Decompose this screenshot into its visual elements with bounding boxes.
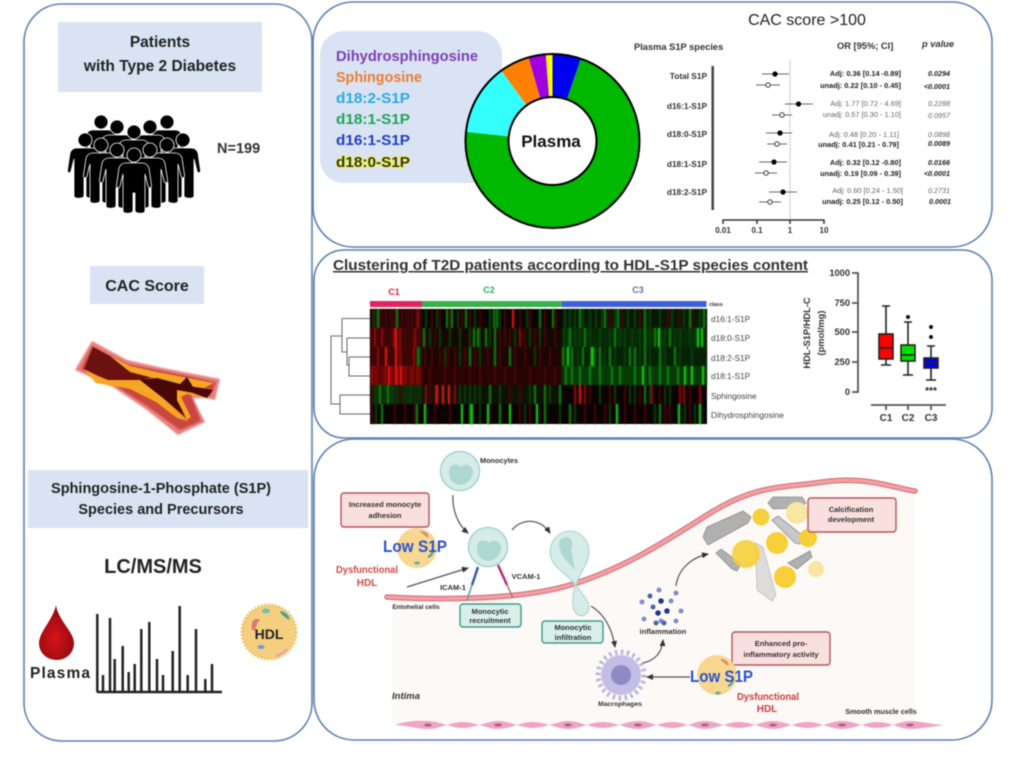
chart: HDL-S1P box plot: 1000	[829, 268, 850, 278]
callout: enhanced pro-inflammatory activity: Enhanced pro-	[755, 639, 808, 648]
chart: HDL-S1P box plot: HDL-S1P/HDL-C	[802, 297, 812, 369]
legend: plasma species: d18:2-S1P	[336, 90, 410, 107]
chart: forest plot: d18:2-S1P	[667, 187, 707, 197]
chart: forest plot: 0.0957	[928, 111, 951, 120]
inflammation cytokines: inflammation	[640, 627, 687, 636]
chart: forest plot: 0.1	[751, 226, 763, 235]
chart: forest plot: p value	[921, 39, 954, 49]
arrow: adhesion to infiltration	[512, 521, 550, 533]
inflammation cytokines	[640, 588, 687, 636]
icon: HDL particle	[242, 605, 296, 659]
chart: forest plot: Total S1P	[670, 71, 707, 81]
label: intima: Intima	[392, 691, 420, 702]
chart: forest plot: 0.2288	[928, 99, 950, 108]
chart: forest plot: 10	[820, 226, 829, 235]
dysfunctional HDL with low S1P, right	[690, 655, 799, 715]
chart: HDL-S1P box plot: ***	[925, 386, 937, 397]
VCAM-1 adhesion molecule: VCAM-1	[512, 572, 540, 581]
heading: patients: with Type 2 Diabetes	[83, 58, 236, 75]
icon: blood drop	[39, 605, 74, 660]
dysfunctional HDL with low S1P, right: Low S1P	[690, 667, 753, 686]
callout: monocytic infiltration	[542, 621, 603, 643]
callout: monocytic recruitment: Monocytic	[471, 607, 509, 616]
chart: HDL-S1P box plot: 0	[845, 387, 850, 397]
callout: monocytic recruitment	[460, 604, 521, 627]
label: plasma: Plasma	[30, 665, 90, 682]
VCAM-1 adhesion molecule	[498, 565, 540, 598]
chart: forest plot: Adj: 0.60 [0.24 - 1.50]	[832, 186, 903, 195]
chart: forest plot: Adj: 1.77 [0.72 - 4.69]	[830, 99, 901, 108]
arrow: monocyte to endothelium	[453, 495, 468, 533]
title: clustering: Clustering of T2D patients according to HDL-S1P species content	[333, 257, 808, 274]
ICAM-1 adhesion molecule	[440, 567, 478, 600]
chart: heatmap: C1	[388, 287, 400, 297]
chart: mass spectrum	[97, 606, 222, 692]
calcification crystals and deposits	[703, 497, 824, 601]
icon: group of patients	[67, 115, 201, 213]
chart: forest plot: 0.0001	[929, 197, 951, 206]
chart: forest plot: 0.0294	[928, 69, 950, 78]
macrophage: Macrophages	[598, 701, 642, 708]
chart: forest plot: Adj: 0.36 [0.14 -0.89]	[830, 69, 902, 78]
chart: forest plot: 1	[788, 226, 793, 235]
endothelium layer	[387, 480, 915, 599]
arrow: HDL to adhesion	[407, 568, 468, 587]
label: smooth muscle cells: Smooth muscle cells	[845, 707, 917, 716]
smooth muscle cell layer	[395, 721, 945, 729]
dysfunctional HDL with low S1P, right: HDL	[757, 704, 777, 715]
chart: forest plot: 0.0898	[928, 130, 950, 139]
chart: forest plot: unadj: 0.25 [0.12 - 0.50]	[822, 197, 904, 206]
icon: HDL particle: HDL	[255, 626, 284, 642]
arrow: macrophage to inflammation	[643, 640, 663, 663]
chart: HDL-S1P box plot: 750	[834, 298, 850, 308]
dysfunctional HDL with low S1P, left: Low S1P	[383, 537, 447, 556]
chart: forest plot: Plasma S1P species	[634, 42, 723, 52]
chart: heatmap: d18:2-S1P	[711, 353, 751, 363]
arrow: HDL to macrophage	[647, 676, 690, 678]
panel: plasma S1P and CAC score	[313, 2, 992, 247]
title: CAC score: CAC score >100	[748, 12, 866, 29]
icon: calcified artery	[75, 341, 220, 435]
callout: increased monocyte adhesion: adhesion	[369, 511, 402, 520]
chart: forest plot: 0.01	[715, 226, 731, 235]
ICAM-1 adhesion molecule: ICAM-1	[440, 583, 466, 592]
chart: forest plot	[634, 39, 954, 235]
legend: plasma species: d18:0-S1P	[336, 154, 410, 171]
callout: increased monocyte adhesion: Increased monocyte	[349, 500, 421, 509]
arrow: infiltration to macrophage	[591, 606, 615, 647]
dysfunctional HDL with low S1P, left: Dysfunctional	[336, 565, 398, 576]
chart: forest plot: <0.0001	[924, 169, 950, 178]
chart: HDL-S1P box plot: C3	[925, 413, 938, 424]
heading: CAC score: CAC Score	[105, 278, 189, 295]
chart: forest plot: 0.0166	[928, 158, 951, 167]
chart: HDL-S1P box plot: 250	[834, 357, 850, 367]
heading: LC/MS/MS: LC/MS/MS	[104, 556, 202, 578]
dysfunctional HDL with low S1P, right: Dysfunctional	[737, 692, 799, 703]
callout: calcification development: development	[828, 515, 875, 524]
chart: heatmap: Dihydrosphingosine	[711, 410, 784, 420]
chart: heatmap: C3	[632, 285, 644, 295]
heading: S1P species: Sphingosine-1-Phosphate (S1P)	[51, 481, 271, 497]
patient count: N=199	[217, 141, 260, 157]
chart: forest plot: Adj: 0.48 [0.20 - 1.11]	[829, 130, 899, 139]
chart: forest plot: Adj: 0.32 [0.12 -0.80]	[830, 158, 902, 167]
chart: heatmap: class	[709, 302, 723, 308]
chart: forest plot: 0.0089	[928, 139, 950, 148]
callout: calcification development: Calcification	[829, 505, 874, 514]
callout: monocytic infiltration: infiltration	[555, 633, 592, 642]
callout: enhanced pro-inflammatory activity	[732, 632, 830, 665]
callout: enhanced pro-inflammatory activity: inflammatory activity	[743, 650, 819, 659]
chart: HDL-S1P box plot: (pmol/mg)	[816, 311, 826, 355]
callout: increased monocyte adhesion	[341, 493, 429, 527]
chart: HDL-S1P box plot: C2	[902, 413, 915, 424]
chart: plasma donut: Plasma	[521, 132, 581, 151]
monocyte nucleus	[559, 537, 575, 570]
callout: monocytic recruitment: recruitment	[469, 616, 511, 625]
chart: forest plot: OR [95%; CI]	[837, 41, 893, 51]
legend: plasma species	[320, 31, 502, 183]
chart: heatmap: d18:0-S1P	[711, 333, 751, 343]
chart: forest plot: d16:1-S1P	[667, 101, 707, 111]
panel: mechanism in the arterial intima	[314, 439, 992, 740]
chart: HDL-S1P box plot: C1	[880, 413, 893, 424]
chart: forest plot: d18:1-S1P	[667, 159, 707, 169]
monocyte adhering	[468, 528, 508, 566]
legend: plasma species: Sphingosine	[336, 69, 422, 86]
panel: clustering of T2D patients	[314, 250, 992, 438]
chart: forest plot: 0.2731	[928, 186, 950, 195]
heading: S1P species: Species and Precursors	[78, 502, 244, 518]
dysfunctional HDL with low S1P, left: HDL	[357, 578, 377, 589]
legend: plasma species: d16:1-S1P	[336, 132, 410, 149]
chart: forest plot: unadj: 0.22 [0.10 - 0.45]	[820, 81, 902, 90]
chart: heatmap: Sphingosine	[711, 391, 757, 401]
chart: forest plot: unadj: 0.57 [0.30 - 1.10]	[823, 110, 901, 119]
monocyte in circulation: Monocytes	[480, 456, 518, 465]
monocyte in circulation	[440, 452, 518, 490]
chart: heatmap: d16:1-S1P	[711, 314, 751, 324]
macrophage	[598, 652, 644, 708]
chart: heatmap: d18:1-S1P	[711, 371, 751, 381]
dysfunctional HDL with low S1P, left	[336, 528, 447, 589]
chart: HDL-S1P box plot: 500	[834, 327, 850, 337]
heading: patients: Patients	[130, 34, 190, 51]
heading: patients	[58, 22, 262, 92]
chart: forest plot: <0.0001	[924, 82, 950, 91]
legend: plasma species: Dihydrosphingosine	[336, 48, 478, 65]
chart: dendrogram	[331, 318, 370, 414]
chart: forest plot: unadj: 0.19 [0.09 - 0.39]	[820, 169, 902, 178]
chart: plasma donut	[466, 54, 640, 228]
monocyte crossing the endothelium	[550, 531, 589, 616]
label: endothelial cells: Entohelial cells	[392, 604, 440, 611]
chart: HDL-S1P box plot	[802, 268, 946, 424]
intima background	[392, 480, 915, 725]
legend: plasma species: d18:1-S1P	[336, 111, 410, 128]
arrow: inflammation to calcification	[676, 554, 708, 586]
chart: heatmap	[370, 285, 784, 424]
chart: forest plot: d18:0-S1P	[667, 129, 707, 139]
callout: calcification development	[808, 498, 896, 532]
chart: heatmap: C2	[483, 285, 495, 295]
callout: monocytic infiltration: Monocytic	[554, 623, 592, 632]
chart: forest plot: unadj: 0.41 [0.21 - 0.79]	[818, 140, 900, 149]
heading: CAC score	[90, 266, 204, 304]
heading: S1P species	[28, 470, 308, 528]
panel: study population and methods	[24, 4, 312, 741]
